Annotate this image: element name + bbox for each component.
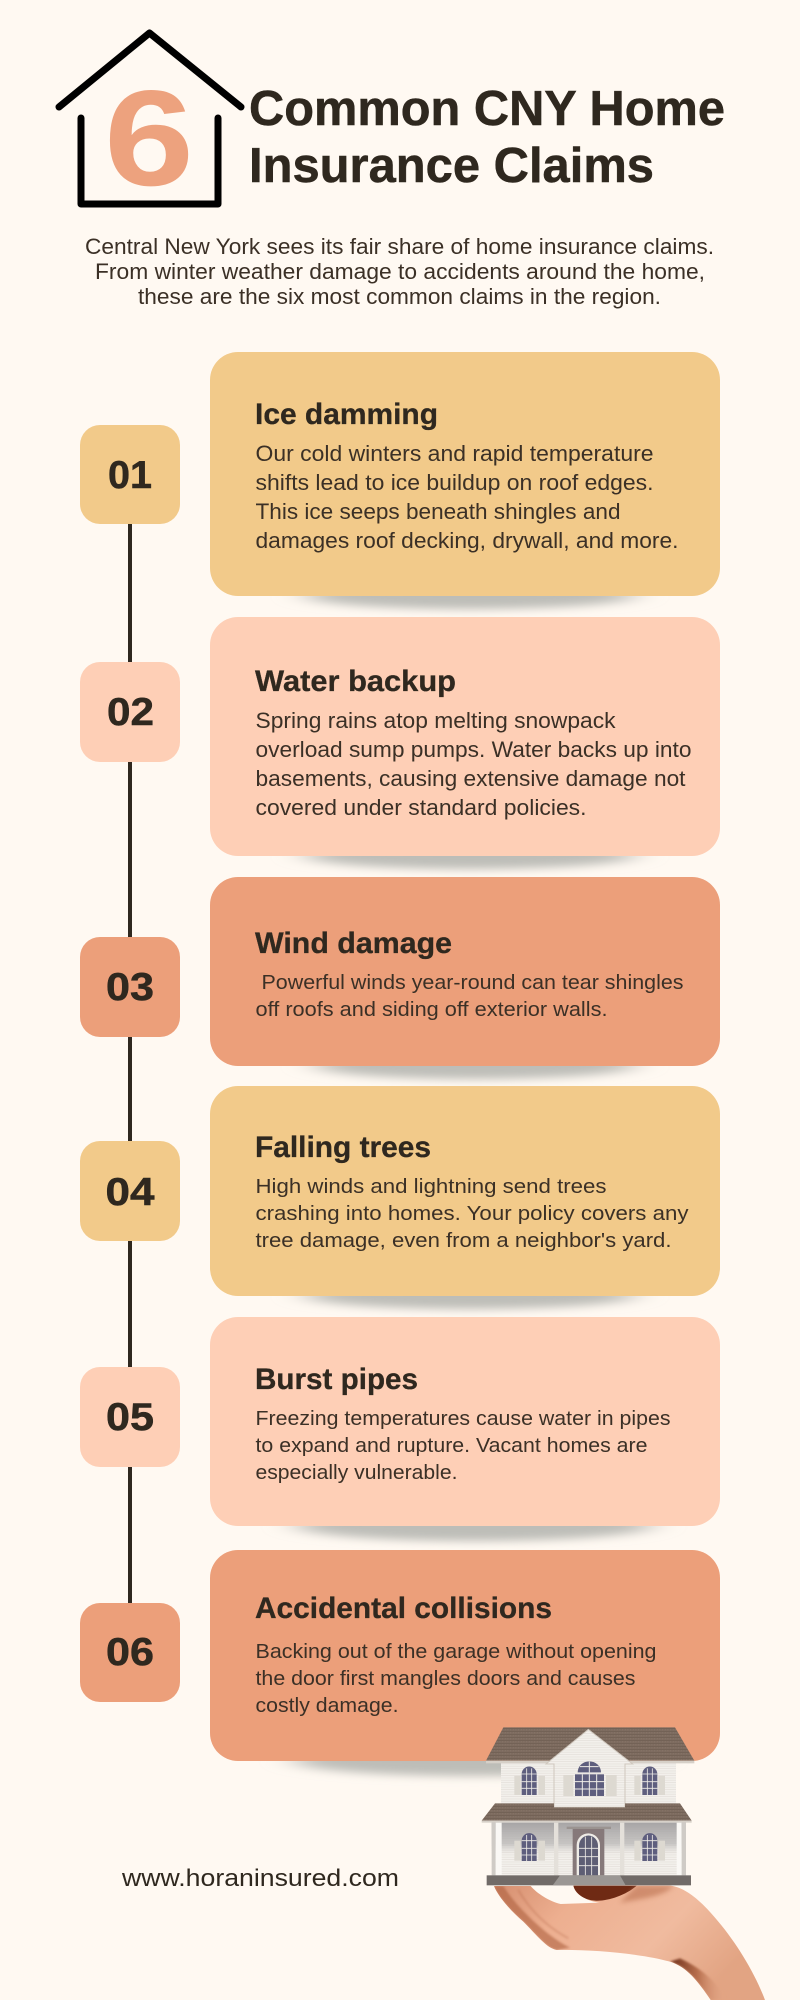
- upper windows: [514, 1761, 665, 1796]
- badge 03: [80, 937, 180, 1037]
- title: [249, 82, 725, 193]
- icon: house outline with number 6: 6: [104, 62, 194, 214]
- panel: falling trees: [210, 1086, 720, 1309]
- badge 06: [80, 1603, 180, 1702]
- panel: water backup: covered under standard policies.: [256, 795, 586, 820]
- badge 01: 01: [108, 454, 152, 497]
- panel: burst pipes: Burst pipes: [255, 1363, 418, 1396]
- panel: wind damage: [210, 877, 720, 1079]
- door: [567, 1827, 611, 1875]
- panel: wind damage: off roofs and siding off exterior walls.: [256, 998, 608, 1021]
- panel: water backup: basements, causing extensive damage not: [256, 766, 686, 791]
- website url: www.horaninsured.com: [121, 1865, 399, 1892]
- panel: accidental collisions: the door first mangles doors and causes: [256, 1667, 636, 1690]
- panel: falling trees: crashing into homes. Your policy covers any: [256, 1202, 689, 1225]
- badge 05: [80, 1367, 180, 1467]
- panel: falling trees: High winds and lightning send trees: [256, 1175, 606, 1198]
- badge 04: 04: [106, 1171, 155, 1214]
- panel: wind damage: Powerful winds year-round can tear shingles: [262, 971, 684, 994]
- panel: accidental collisions: costly damage.: [256, 1694, 398, 1717]
- panel: water backup: overload sump pumps. Water backs up into: [256, 737, 692, 762]
- panel: accidental collisions: Accidental collisions: [255, 1592, 552, 1625]
- intro text: Central New York sees its fair share of home insurance claims.: [85, 234, 714, 259]
- panel: water backup: Water backup: [255, 665, 456, 698]
- badge 03: 03: [106, 966, 154, 1009]
- intro text: From winter weather damage to accidents around the home,: [95, 259, 705, 284]
- panel: burst pipes: Freezing temperatures cause water in pipes: [256, 1407, 670, 1430]
- lower windows: [514, 1833, 665, 1861]
- icon: hand: [494, 1886, 765, 2000]
- panel: ice damming: Ice damming: [255, 398, 438, 431]
- badge 06: 06: [106, 1631, 154, 1674]
- panel: falling trees: tree damage, even from a neighbor's yard.: [256, 1229, 672, 1252]
- panel: ice damming: Our cold winters and rapid temperature: [256, 441, 654, 466]
- panel: accidental collisions: Backing out of the garage without opening: [256, 1640, 656, 1663]
- icon: house outline with number 6: [59, 33, 241, 214]
- badge 01: [80, 425, 180, 524]
- badge 04: [80, 1141, 180, 1241]
- panel: ice damming: [210, 352, 720, 609]
- icon: model house: [482, 1727, 694, 1885]
- panel: water backup: [210, 617, 720, 869]
- panel: ice damming: damages roof decking, drywall, and more.: [256, 528, 678, 553]
- badge 05: 05: [106, 1396, 154, 1439]
- icon: hand holding house: [482, 1727, 765, 2000]
- panel: ice damming: This ice seeps beneath shingles and: [256, 499, 620, 524]
- panel: burst pipes: [210, 1317, 720, 1541]
- intro text: these are the six most common claims in the region.: [138, 284, 661, 309]
- panel: burst pipes: to expand and rupture. Vacant homes are: [256, 1434, 648, 1457]
- intro text: [85, 234, 714, 309]
- panel: ice damming: shifts lead to ice buildup on roof edges.: [256, 470, 654, 495]
- timeline connector line: [128, 500, 132, 1620]
- badge 02: [80, 662, 180, 762]
- panel: burst pipes: especially vulnerable.: [256, 1461, 458, 1484]
- panel: wind damage: Wind damage: [255, 927, 452, 960]
- panel: falling trees: Falling trees: [255, 1131, 431, 1164]
- panel: accidental collisions: [210, 1550, 720, 1776]
- title: Common CNY Home: [249, 82, 725, 136]
- panel: water backup: Spring rains atop melting snowpack: [256, 708, 617, 733]
- badge 02: 02: [107, 691, 154, 734]
- title: Insurance Claims: [249, 139, 654, 193]
